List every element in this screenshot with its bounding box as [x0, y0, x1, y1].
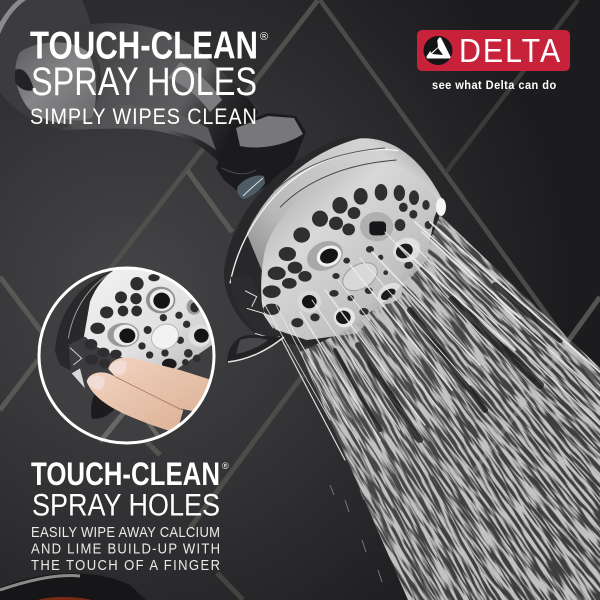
inset holes — [85, 274, 200, 368]
top heading block — [30, 24, 268, 129]
spray holes — [263, 184, 432, 327]
water spray — [262, 215, 600, 600]
Delta logo — [417, 30, 570, 92]
jet sector: centre right — [395, 255, 600, 600]
lower description: THE TOUCH OF A FINGER — [31, 557, 220, 573]
finger nails — [109, 361, 127, 375]
bottom chrome fixture — [0, 573, 146, 600]
lower description — [31, 524, 220, 573]
stray droplets — [330, 485, 382, 582]
logo tagline: see what Delta can do — [432, 80, 556, 92]
chrome band — [247, 138, 442, 307]
top tagline: SIMPLY WIPES CLEAN — [30, 105, 257, 129]
inset grout lines — [100, 412, 126, 439]
curved arm — [60, 23, 258, 165]
lever handle — [227, 335, 284, 363]
glint on shower head edge — [436, 198, 446, 216]
inset nozzles — [107, 287, 211, 369]
logo wordmark: DELTA — [459, 32, 561, 69]
lower heading block — [31, 456, 229, 573]
registered mark: ® — [222, 461, 229, 471]
lower left dark mesh — [231, 277, 282, 337]
logo emblem — [424, 36, 452, 65]
inset head rim — [55, 272, 112, 370]
flange outer ring — [0, 0, 99, 130]
lower finger — [87, 372, 183, 433]
lower description: EASILY WIPE AWAY CALCIUM — [31, 524, 220, 540]
registered mark: ® — [260, 31, 268, 43]
lower title: TOUCH-CLEAN — [31, 456, 220, 492]
inset lever — [91, 393, 115, 419]
chrome screw — [237, 175, 265, 199]
jet sector: right — [425, 215, 600, 473]
shower arm and wall flange — [0, 0, 258, 165]
top title: TOUCH-CLEAN — [30, 24, 258, 68]
inset circle: finger wiping spray face — [39, 265, 217, 445]
nozzles — [297, 212, 424, 327]
upper finger — [108, 358, 210, 411]
inset white ring — [39, 268, 214, 443]
flange light reflection — [15, 42, 96, 123]
spray base haze — [300, 215, 600, 600]
outer dark rim — [224, 136, 445, 350]
jet sector: centre left — [353, 293, 596, 600]
spray face — [261, 163, 437, 340]
dark gaps between jets — [335, 285, 560, 440]
top subtitle: SPRAY HOLES — [31, 60, 257, 104]
jet sector: left — [300, 327, 497, 600]
inset spray face — [83, 265, 217, 372]
lower description: AND LIME BUILD-UP WITH — [31, 541, 220, 557]
logo red plate — [417, 30, 570, 71]
center disc — [338, 257, 382, 296]
shower head — [224, 136, 445, 350]
bright water jets — [262, 222, 600, 460]
lower subtitle: SPRAY HOLES — [32, 486, 220, 522]
shower head neck — [216, 113, 306, 199]
inset center disc — [151, 324, 179, 350]
